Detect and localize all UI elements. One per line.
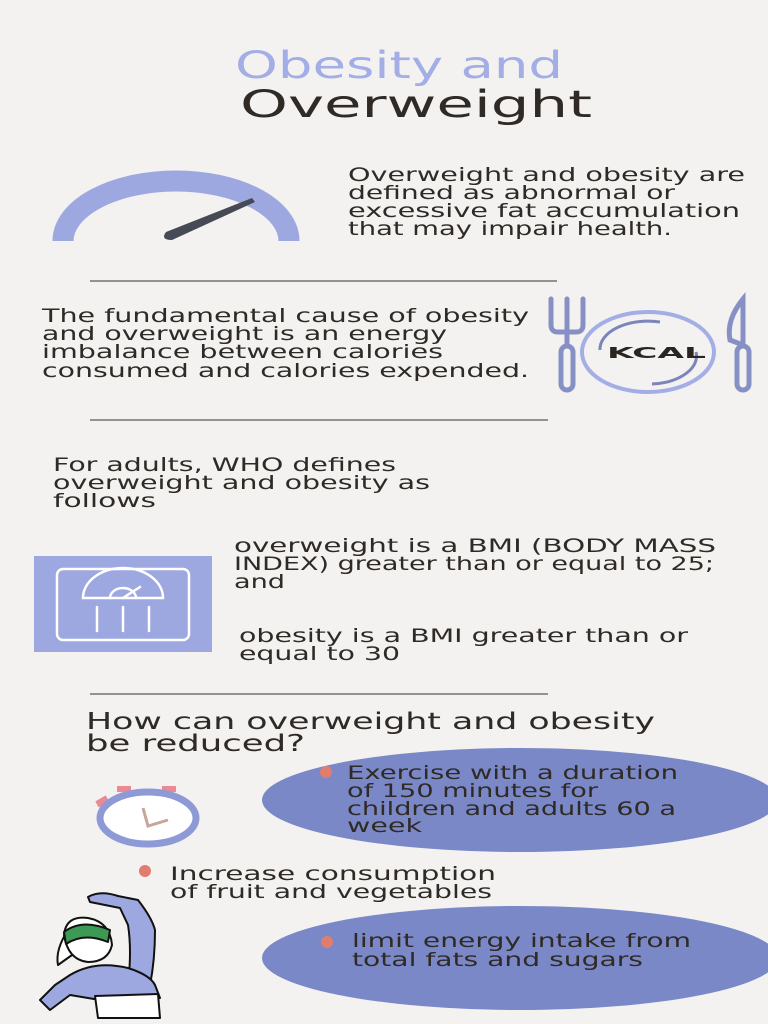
text: definition: defined as abnormal or [348,182,675,204]
title [235,44,592,126]
icon: plate kcal: KCAL [607,344,707,362]
heading: reduction: How can overweight and obesity [86,709,655,735]
text: cause: and overweight is an energy [42,323,447,345]
text: overweight BMI: and [234,571,285,593]
text: cause: imbalance between calories [42,341,443,363]
text: obesity BMI [239,625,688,665]
text: definition: excessive fat accumulation [348,200,740,222]
illustration: person stretching [40,893,160,1018]
title: Obesity and [235,44,563,87]
title: Overweight [240,83,592,126]
text: definition: Overweight and obesity are [348,164,745,186]
callout: limit intake: limit energy intake from [352,930,691,952]
text: overweight BMI: INDEX) greater than or equal to 25; [234,553,714,575]
text: WHO definition: overweight and obesity as [53,472,430,494]
text: obesity BMI: equal to 30 [239,643,400,665]
text: definition: that may impair health. [348,218,672,240]
text: WHO definition [53,454,430,512]
callout: exercise: week [347,815,422,837]
text: overweight BMI: overweight is a BMI (BODY MASS [234,535,716,557]
text: fruit: of fruit and vegetables [170,881,492,903]
icon: scale [34,556,212,652]
text: cause [40,305,529,382]
text: obesity BMI: obesity is a BMI greater than or [239,625,688,647]
callout: exercise: of 150 minutes for [347,780,598,802]
callout: limit intake: total fats and sugars [352,949,643,971]
text: WHO definition: follows [53,490,156,512]
callout: exercise [262,748,768,852]
text: cause: The fundamental cause of obesity [40,305,529,327]
icon: clock [95,786,196,844]
icon: gauge [63,181,289,241]
text: WHO definition: For adults, WHO defines [53,454,396,476]
callout: exercise: children and adults 60 a [347,798,676,820]
heading: reduction [86,709,655,757]
callout: limit intake [262,906,768,1010]
callout: exercise: Exercise with a duration [347,762,678,784]
heading: reduction: be reduced? [86,731,305,757]
text: fruit: Increase consumption [170,863,496,885]
text: overweight BMI [234,535,716,593]
text: cause: consumed and calories expended. [42,360,529,382]
text: definition [348,164,745,240]
text: fruit [139,863,496,903]
icon: plate kcal [551,299,749,392]
